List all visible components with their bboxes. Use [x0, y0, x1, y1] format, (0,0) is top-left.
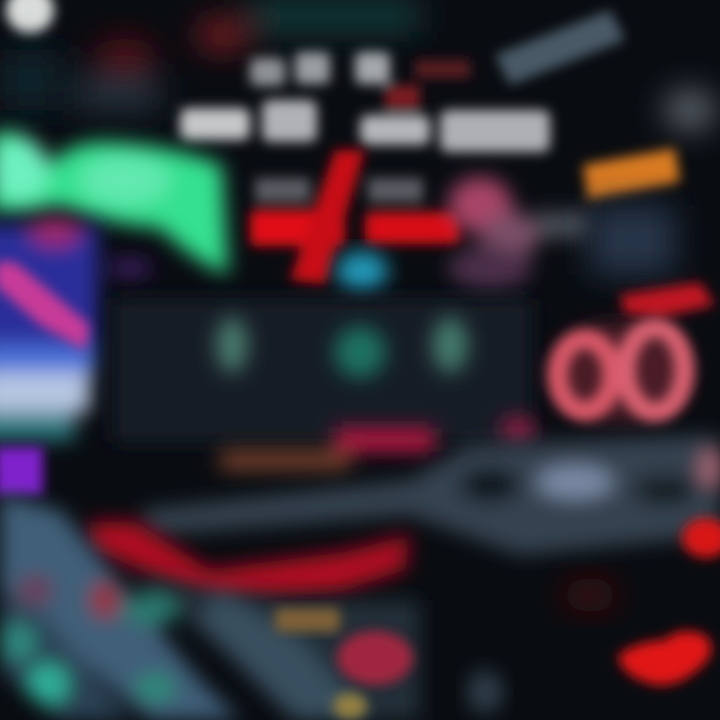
band: mixed red accents — [220, 416, 536, 470]
icon: teal badge — [336, 251, 388, 291]
panel: pink cluster — [448, 177, 590, 290]
red cross chart — [250, 150, 460, 285]
icon: yellow marker — [333, 693, 367, 719]
panel: bottom right dark red — [562, 577, 618, 613]
chart: donut rings — [548, 322, 692, 422]
panel: green banner — [0, 131, 228, 275]
callout: orange tag — [583, 148, 680, 200]
chart: red band — [90, 522, 410, 602]
top header decorations — [0, 0, 420, 110]
icon: red heart shape — [618, 631, 711, 685]
panel: right column dim — [590, 90, 716, 275]
icon: bottom grey dot — [467, 670, 503, 714]
icon: pink marker — [337, 631, 413, 685]
icon: orange marker — [275, 608, 340, 632]
block: purple accent — [0, 447, 43, 495]
pink diagonal streak — [0, 262, 90, 350]
red accent above circles — [620, 282, 715, 318]
chart: green glows — [216, 317, 468, 378]
panel: top right grey banner — [495, 10, 625, 85]
icon: red accent right — [682, 518, 720, 558]
panel: bottom left stripes — [0, 495, 420, 720]
top glow: header lamp — [6, 0, 54, 34]
panel: dark central dashboard — [112, 298, 532, 443]
title — [180, 52, 550, 152]
panel: left blue image — [0, 218, 152, 440]
panel: slate band — [140, 435, 720, 555]
